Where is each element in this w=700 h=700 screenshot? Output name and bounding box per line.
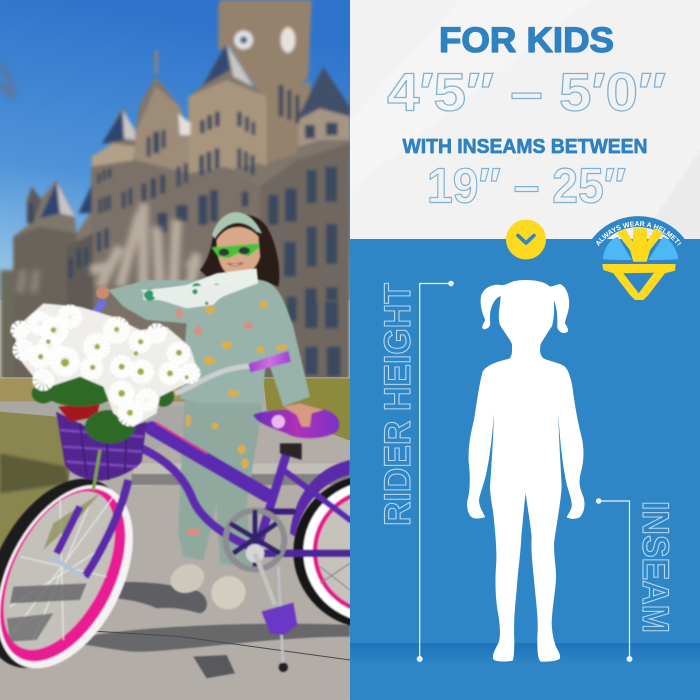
icon: always wear a helmet badge	[592, 216, 685, 300]
red flower pot	[58, 402, 100, 422]
badge text: ALWAYS WEAR A HELMET!	[596, 221, 682, 246]
building: city hall	[13, 0, 350, 380]
inseam label: INSEAM	[635, 501, 676, 633]
girl	[96, 212, 310, 614]
girl: floral print	[186, 301, 288, 468]
girl: hoodie	[108, 280, 310, 407]
girl: hair	[200, 215, 279, 287]
helmet shell left	[603, 237, 632, 260]
bare trees	[0, 63, 200, 293]
girl: scarf	[143, 268, 258, 301]
girl's hand on saddle	[283, 403, 323, 427]
girl: smile	[227, 263, 243, 266]
rear wheel	[292, 476, 350, 626]
distant trees behind building	[0, 267, 16, 378]
white flower bouquet	[13, 303, 200, 427]
rider height range: 4′5″ – 5′0″	[387, 62, 666, 122]
panel: blue sizing background	[350, 239, 700, 700]
clock faces	[234, 31, 253, 49]
girl: headband	[212, 212, 262, 238]
basket	[56, 412, 147, 481]
girl: sunglasses	[212, 243, 259, 258]
helmet shell right	[648, 237, 678, 260]
girl: hand on handlebar	[96, 286, 109, 299]
floor band	[350, 643, 700, 665]
panel: photo of girl with bicycle	[0, 0, 350, 700]
rider height bracket	[417, 281, 453, 661]
saddle	[253, 409, 339, 438]
panel: light header background	[350, 0, 700, 240]
girl: face	[217, 227, 260, 276]
helmet yellow vents	[617, 228, 663, 262]
helmet brim and straps	[602, 264, 676, 300]
inseam range: 19″ – 25″	[427, 160, 626, 214]
front fork	[85, 480, 128, 577]
leaves	[32, 372, 174, 443]
kickstand	[278, 567, 283, 670]
heading: for kids: FOR KIDS	[439, 20, 614, 60]
rider height label: RIDER HEIGHT	[377, 283, 418, 526]
subheading: with inseams between: WITH INSEAMS BETWEEN	[402, 135, 648, 158]
pedal	[262, 603, 297, 635]
seat post	[280, 443, 302, 460]
icon: yellow chevron button	[506, 220, 546, 260]
sky	[0, 0, 350, 300]
handlebar	[175, 366, 250, 393]
girl: shoes	[170, 564, 204, 594]
inseam bracket	[596, 499, 632, 661]
frame tubes	[142, 423, 350, 553]
girl: pants	[178, 390, 263, 567]
child silhouette	[467, 280, 585, 662]
badge blue arc	[596, 222, 680, 242]
front wheel	[0, 478, 134, 669]
lower background: lawn and pavement	[0, 377, 350, 700]
chainring and crank	[226, 510, 284, 605]
rear fender	[290, 460, 350, 537]
bicycle	[0, 298, 350, 673]
windows	[28, 85, 341, 377]
